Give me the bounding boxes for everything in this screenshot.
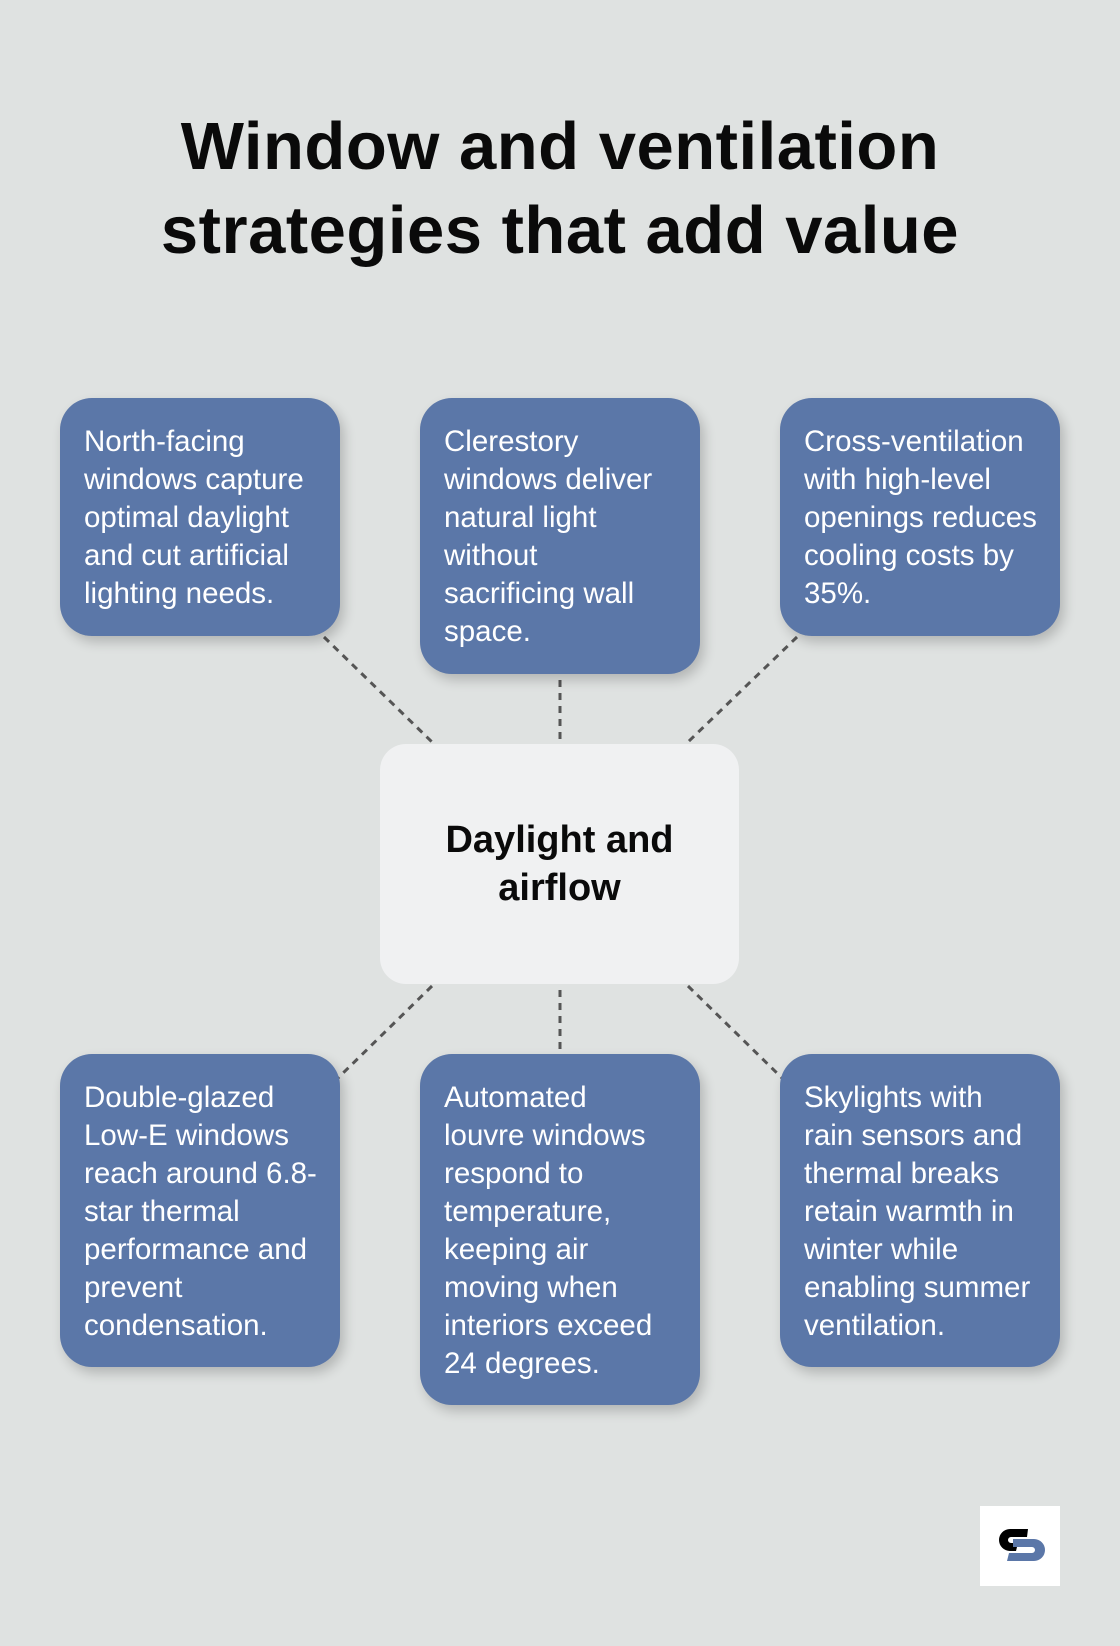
box: skylights: thermal breaks	[804, 1157, 999, 1190]
box: louvre: interiors exceed	[444, 1309, 652, 1342]
box: skylights	[780, 1054, 1060, 1367]
title	[161, 109, 959, 268]
box: cross-ventilation: with high-level	[804, 463, 991, 496]
box: clerestory: space.	[444, 615, 531, 648]
box: north-facing: lighting needs.	[84, 577, 274, 610]
logo	[980, 1506, 1060, 1586]
box: double-glazed: star thermal	[84, 1195, 240, 1228]
box: clerestory: sacrificing wall	[444, 577, 634, 610]
box: cross-ventilation: 35%.	[804, 577, 871, 610]
box: skylights: retain warmth in	[804, 1195, 1014, 1228]
box: north-facing: and cut artificial	[84, 539, 289, 572]
title: strategies that add value	[161, 193, 959, 268]
box: double-glazed: prevent	[84, 1271, 182, 1304]
box: clerestory: windows deliver	[444, 463, 652, 496]
box: north-facing: optimal daylight	[84, 501, 289, 534]
box: skylights: rain sensors and	[804, 1119, 1022, 1152]
box: louvre: respond to	[444, 1157, 583, 1190]
box: skylights: winter while	[804, 1233, 958, 1266]
box: north-facing: windows capture	[84, 463, 304, 496]
box: cross-ventilation	[780, 398, 1060, 636]
box: louvre: moving when	[444, 1271, 618, 1304]
box: double-glazed: reach around 6.8-	[84, 1157, 317, 1190]
box: double-glazed: Double-glazed	[84, 1081, 274, 1114]
box: louvre: 24 degrees.	[444, 1347, 600, 1380]
box: louvre	[420, 1054, 700, 1405]
box: louvre: keeping air	[444, 1233, 588, 1266]
title: Window and ventilation	[181, 109, 939, 184]
box: louvre: Automated	[444, 1081, 587, 1114]
box: cross-ventilation: cooling costs by	[804, 539, 1014, 572]
box: cross-ventilation: Cross-ventilation	[804, 425, 1024, 458]
box: clerestory: Clerestory	[444, 425, 578, 458]
box: clerestory	[420, 398, 700, 674]
center: daylight and airflow	[380, 744, 739, 984]
box: clerestory: without	[444, 539, 537, 572]
box: cross-ventilation: openings reduces	[804, 501, 1037, 534]
box: double-glazed: Low-E windows	[84, 1119, 289, 1152]
center: daylight and airflow: Daylight and	[445, 819, 674, 861]
box: skylights: ventilation.	[804, 1309, 945, 1342]
box: double-glazed: condensation.	[84, 1309, 268, 1342]
box: louvre: temperature,	[444, 1195, 611, 1228]
box: clerestory: natural light	[444, 501, 597, 534]
box: louvre: louvre windows	[444, 1119, 646, 1152]
box: skylights: Skylights with	[804, 1081, 983, 1114]
box: skylights: enabling summer	[804, 1271, 1030, 1304]
box: double-glazed	[60, 1054, 340, 1367]
box: north-facing: North-facing	[84, 425, 245, 458]
box: north-facing	[60, 398, 340, 636]
center: daylight and airflow: airflow	[498, 867, 621, 909]
box: double-glazed: performance and	[84, 1233, 307, 1266]
